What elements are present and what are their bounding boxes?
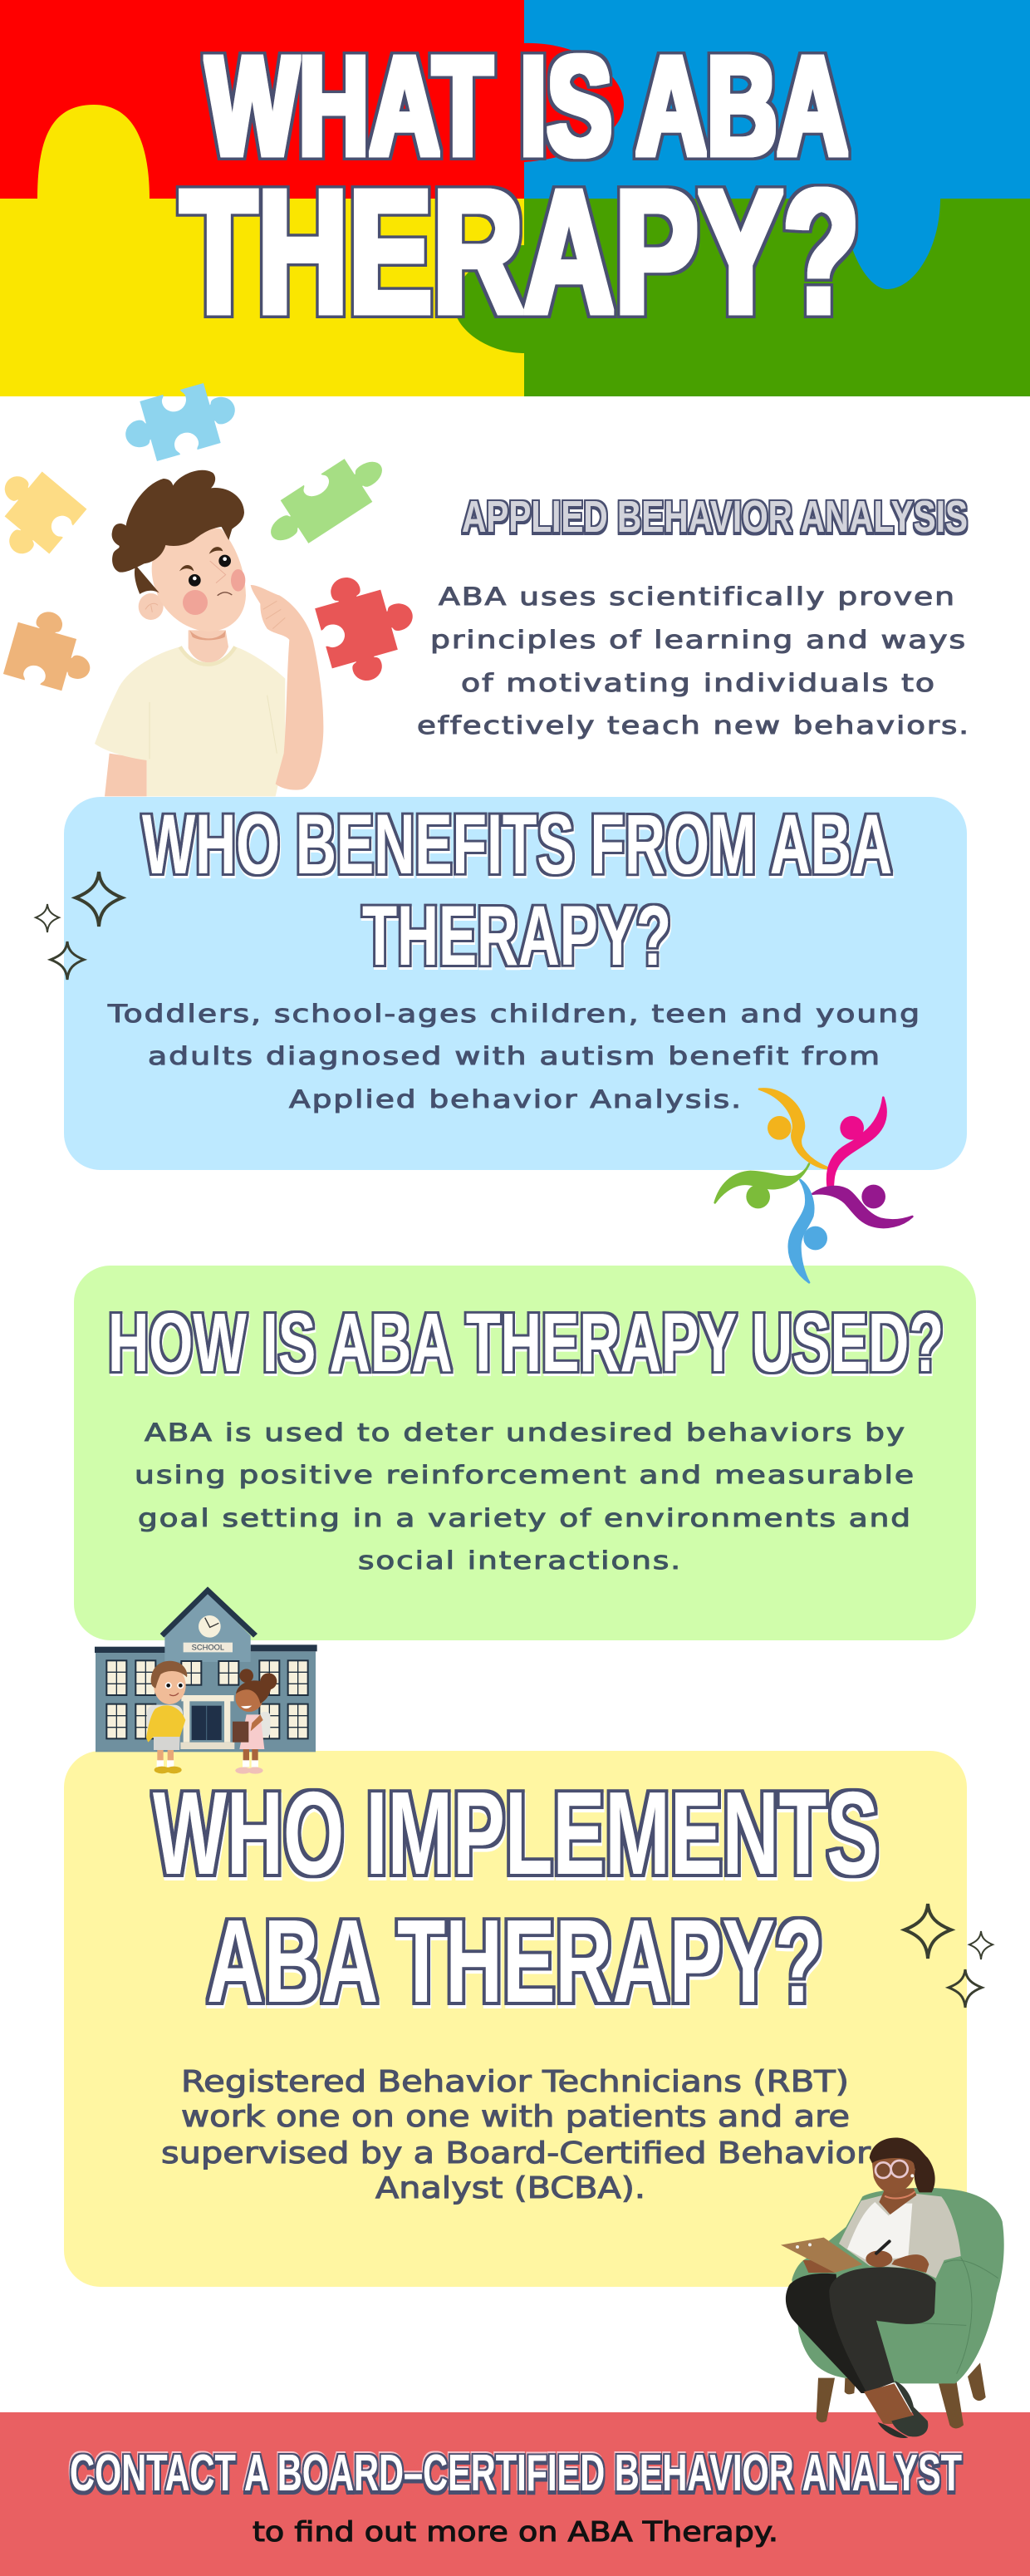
text block: who implements body: supervised by a Board-Certified Behavior	[161, 2136, 871, 2170]
text block: how is aba used body: social interactions.	[358, 1546, 682, 1575]
text: contact subline: to find out more on ABA Therapy.	[253, 2515, 778, 2548]
text block: who benefits body: adults diagnosed with autism benefit from	[148, 1042, 881, 1070]
text block: who implements body: work one on one with patients and are	[181, 2100, 850, 2134]
footer band	[0, 2412, 1030, 2576]
child: boy	[146, 1661, 187, 1773]
text block: who benefits body	[107, 1000, 921, 1113]
heading: who implements	[153, 1767, 879, 2028]
illustration: school with two children	[95, 1586, 317, 1774]
title	[180, 27, 860, 350]
text block: how is aba used body: ABA is used to deter undesired behaviors by	[145, 1418, 906, 1447]
text block: who implements body	[161, 2065, 871, 2205]
text block: who implements body: Registered Behavior Technicians (RBT)	[181, 2065, 849, 2099]
icon: sparkles left	[36, 872, 122, 980]
illustration: thinking boy	[95, 470, 323, 796]
sign text: SCHOOL	[192, 1644, 224, 1652]
header puzzle background	[0, 0, 1030, 396]
icon: sparkles right	[905, 1904, 993, 2008]
heading: who benefits	[142, 797, 892, 983]
icons: floating puzzle pieces	[0, 376, 427, 696]
text block: how is aba used body	[135, 1418, 915, 1575]
heading: who benefits: THERAPY?	[362, 888, 671, 983]
text block: applied behavior analysis: effectively teach new behaviors.	[417, 711, 970, 740]
text block: applied behavior analysis	[417, 492, 970, 740]
text block: applied behavior analysis: ABA uses scientifically proven	[439, 583, 956, 611]
panel: how is aba used	[74, 1266, 976, 1640]
text block: who benefits body: Toddlers, school-ages children, teen and young	[107, 1000, 921, 1028]
illustration: therapist in green armchair	[781, 2138, 1004, 2438]
panel: who benefits	[64, 797, 967, 1170]
icon: colorful people circle	[715, 1089, 912, 1282]
text block: how is aba used body: using positive reinforcement and measurable	[135, 1461, 915, 1489]
text block: who benefits body: Applied behavior Analysis.	[289, 1085, 743, 1113]
child: girl	[233, 1669, 277, 1774]
panel: who implements	[64, 1751, 967, 2287]
text block: applied behavior analysis: principles of learning and ways	[430, 626, 967, 654]
text block: applied behavior analysis: of motivating individuals to	[461, 669, 936, 697]
text block: how is aba used body: goal setting in a variety of environments and	[138, 1504, 912, 1532]
text block: who implements body: Analyst (BCBA).	[375, 2171, 645, 2205]
